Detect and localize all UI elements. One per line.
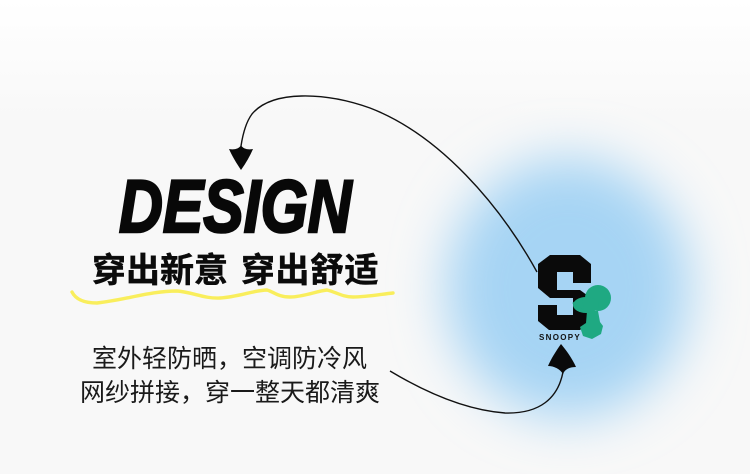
- letter S: [538, 255, 591, 330]
- subtitle part 2: 穿出舒适: [241, 252, 379, 290]
- title: DESIGN: DESIGN: [119, 166, 354, 248]
- snoopy wordmark: SNOOPY: [539, 333, 581, 342]
- body line 1: 室外轻防晒，空调防冷风: [92, 345, 367, 373]
- blue glow: [446, 158, 690, 418]
- yellow underline: [72, 290, 393, 303]
- body text: [80, 345, 380, 407]
- arrow: curve from logo to title: [229, 96, 537, 272]
- subtitle part 1: 穿出新意: [92, 252, 228, 290]
- subtitle: [92, 252, 379, 290]
- arrow: curve from text to logo: [390, 344, 576, 413]
- snoopy figure: [572, 285, 611, 339]
- logo: Snoopy S: [538, 255, 611, 342]
- body line 2: 网纱拼接，穿一整天都清爽: [80, 379, 380, 407]
